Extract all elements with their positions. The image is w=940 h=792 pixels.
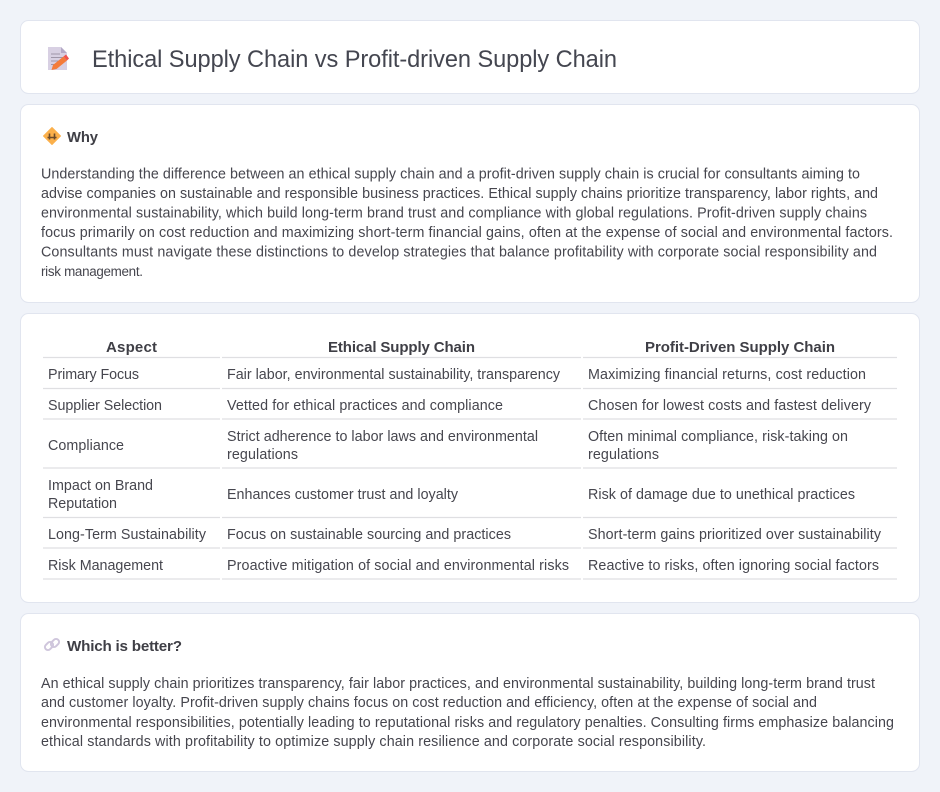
text block: which is better paragraph	[41, 676, 894, 750]
row: compliance: Strict adherence to labor laws and environmental	[227, 429, 538, 445]
icon: document with pencil	[48, 47, 69, 70]
text block: why paragraph	[41, 166, 893, 279]
icon: warning diamond	[44, 128, 60, 144]
heading: why: Why	[67, 130, 99, 146]
row: long-term sustainability: Focus on sustainable sourcing and practices	[227, 527, 511, 543]
panel: title header	[20, 20, 920, 94]
row: impact on brand reputation: Impact on Brand	[48, 478, 153, 494]
row: impact on brand reputation: Reputation	[48, 496, 117, 512]
title: Ethical Supply Chain vs Profit-driven Supply Chain	[92, 47, 617, 73]
row: primary focus: Maximizing financial returns, cost reduction	[588, 367, 866, 383]
text block: why paragraph: focus primarily on cost reduction and maximizing short-term financial gains, often at the expense of social and environmental factors.	[41, 225, 893, 241]
row: primary focus	[48, 367, 866, 383]
row: supplier selection: Chosen for lowest costs and fastest delivery	[588, 398, 872, 414]
row: compliance: regulations	[227, 447, 298, 463]
row: compliance: Often minimal compliance, risk-taking on	[588, 429, 848, 445]
row: impact on brand reputation	[48, 478, 855, 512]
icon: link	[44, 638, 60, 651]
row: supplier selection	[48, 398, 872, 414]
text block: which is better paragraph: ethical standards with profitability to optimize supply chain resilience and corporate social responsibility.	[41, 734, 706, 750]
row: long-term sustainability: Short-term gains prioritized over sustainability	[588, 527, 882, 543]
row: supplier selection: Supplier Selection	[48, 398, 162, 414]
panel: why	[20, 104, 920, 302]
row: risk management: Proactive mitigation of social and environmental risks	[227, 558, 569, 574]
row: risk management	[48, 558, 879, 574]
panel: comparison table	[20, 314, 920, 602]
text block: why paragraph: environmental sustainability, which build long-term brand trust and compliance with global regulations. Profit-driven supply chains	[41, 206, 867, 222]
row: risk management: Reactive to risks, often ignoring social factors	[588, 558, 879, 574]
row: long-term sustainability: Long-Term Sustainability	[48, 527, 207, 543]
heading: which is better: Which is better?	[67, 638, 182, 655]
text block: why paragraph: advise companies on sustainable and responsible business practices. Ethical supply chains prioritize transparency, labor rights, and	[41, 186, 878, 202]
row: supplier selection: Vetted for ethical practices and compliance	[227, 398, 503, 414]
row: compliance: regulations	[588, 447, 659, 463]
row: impact on brand reputation: Risk of damage due to unethical practices	[588, 487, 855, 503]
text block: why paragraph: Understanding the difference between an ethical supply chain and a profit-driven supply chain is crucial for consultants aiming to	[41, 166, 860, 182]
row: compliance: Compliance	[48, 438, 124, 454]
row: compliance	[48, 429, 848, 463]
row: long-term sustainability	[48, 527, 882, 543]
text block: which is better paragraph: environmental responsibilities, potentially leading to reputational risks and regulatory penalties. Consulting firms emphasize balancing	[41, 715, 894, 731]
row: primary focus: Fair labor, environmental sustainability, transparency	[227, 367, 561, 383]
table header row: Ethical Supply Chain	[328, 339, 475, 356]
text block: why paragraph: risk management.	[41, 264, 143, 279]
table header row	[106, 339, 835, 356]
text block: which is better paragraph: An ethical supply chain prioritizes transparency, fair labor practices, and environmental sustainability, building long-term brand trust	[41, 676, 875, 692]
table header row: Profit-Driven Supply Chain	[645, 339, 835, 356]
text block: why paragraph: Consultants must navigate these distinctions to develop strategies that balance profitability with corporate social responsibility and	[41, 244, 877, 260]
panel: which is better	[20, 614, 920, 772]
row: impact on brand reputation: Enhances customer trust and loyalty	[227, 487, 459, 503]
table header row: Aspect	[106, 339, 157, 356]
text block: which is better paragraph: and customer loyalty. Profit-driven supply chains focus on cost reduction and efficiency, often at the expense of social and	[41, 695, 817, 711]
row: risk management: Risk Management	[48, 558, 163, 574]
row: primary focus: Primary Focus	[48, 367, 139, 383]
